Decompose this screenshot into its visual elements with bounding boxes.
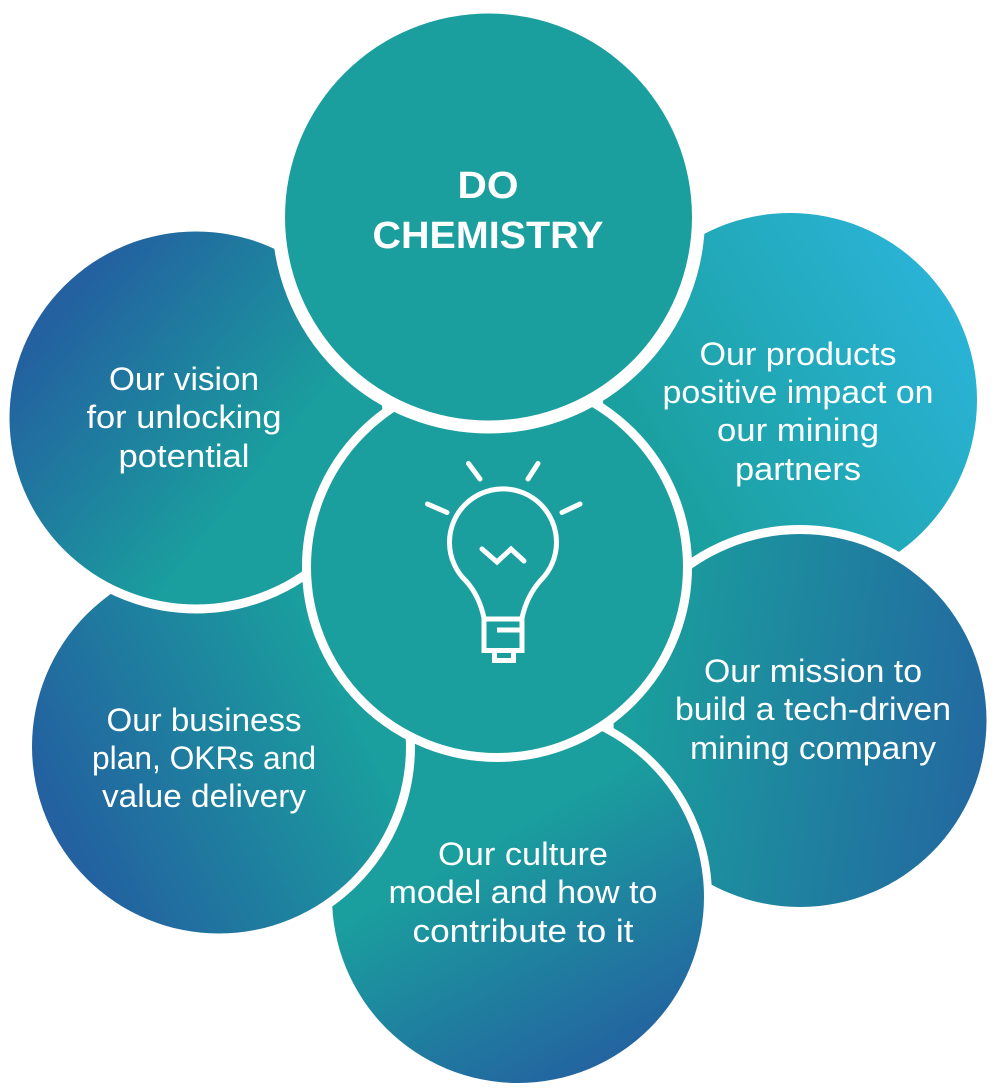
text: our mission [675, 653, 951, 766]
heading: do chemistry [372, 165, 604, 257]
text: our vision: potential [118, 438, 250, 474]
text: our mission: build a tech-driven [675, 691, 951, 727]
petal: our mission [614, 534, 986, 907]
text: our mission: Our mission to [704, 653, 922, 689]
text: our vision [86, 361, 282, 474]
text: our products: partners [735, 451, 861, 487]
text: our culture: Our culture [438, 836, 608, 872]
petal: our culture [332, 711, 704, 1083]
text: our culture: model and how to [388, 874, 658, 910]
text: our business plan: Our business [106, 702, 302, 738]
text: our culture: contribute to it [412, 913, 634, 949]
heading: do chemistry: CHEMISTRY [372, 215, 604, 257]
text: our vision: Our vision [109, 361, 259, 397]
petal: our business plan [32, 560, 406, 934]
text: our business plan: value delivery [102, 778, 306, 814]
text: our products: positive impact on [662, 374, 934, 410]
text: our products [662, 336, 934, 487]
text: our mission: mining company [690, 730, 936, 766]
text: our vision: for unlocking [86, 399, 282, 435]
text: our business plan [92, 702, 316, 814]
petal: our vision [10, 232, 382, 604]
text: our business plan: plan, OKRs and [92, 740, 316, 776]
petal: our products [603, 213, 977, 587]
top circle: do chemistry [285, 14, 692, 420]
text: our products: Our products [700, 336, 896, 372]
text: our products: our mining [717, 412, 879, 448]
icon: light bulb [428, 464, 580, 660]
text: our culture [388, 836, 658, 949]
center circle [306, 376, 688, 758]
heading: do chemistry: DO [458, 165, 518, 207]
